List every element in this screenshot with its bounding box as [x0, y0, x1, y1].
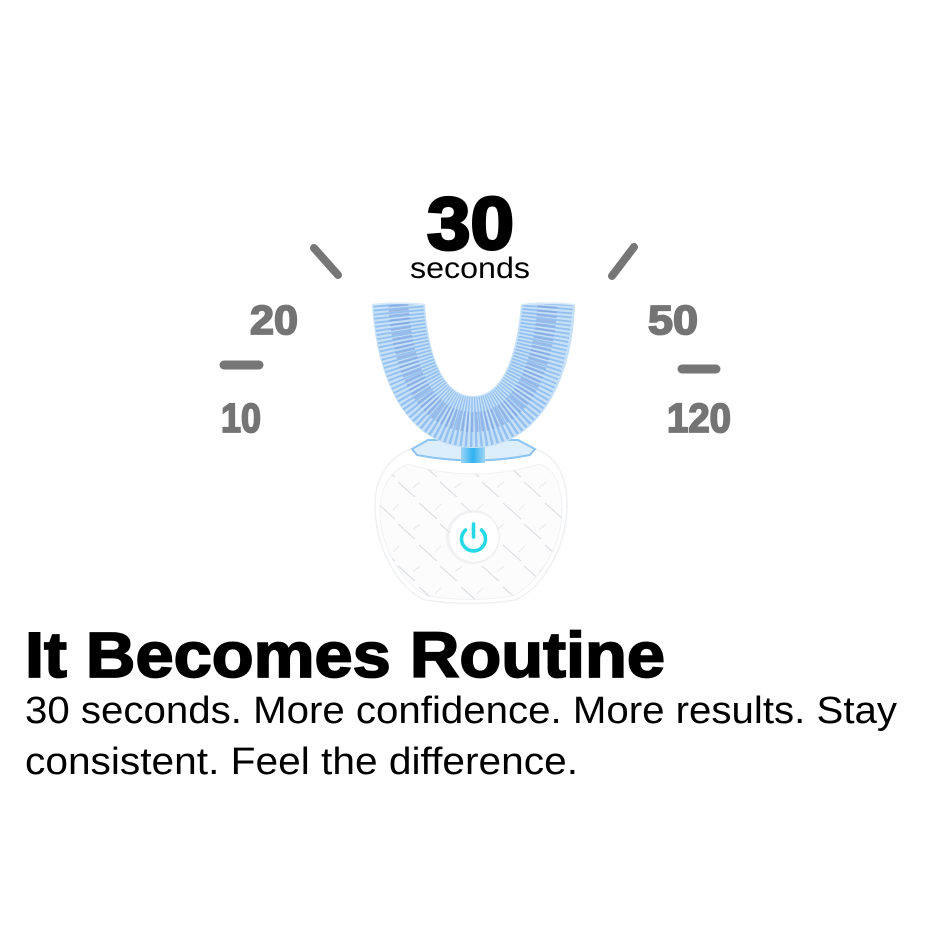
blue collar: [412, 440, 535, 463]
title: It Becomes Routine: [25, 619, 665, 691]
description text: 30 seconds. More confidence. More results. Stay: [25, 690, 897, 732]
tick upper left: [314, 248, 338, 275]
brush head bristles: [372, 302, 575, 448]
label 20: 20: [250, 297, 298, 343]
description text: [25, 690, 897, 783]
label 120: 120: [667, 395, 731, 441]
tick left: [224, 360, 259, 370]
description text: consistent. Feel the difference.: [25, 741, 578, 783]
gauge scale: [221, 247, 731, 441]
gauge value: 30 seconds: [410, 182, 530, 285]
label 10: 10: [221, 395, 261, 441]
seconds label: seconds: [410, 252, 530, 285]
icon: power symbol: [462, 524, 486, 551]
handle body: [375, 449, 567, 604]
label 50: 50: [648, 297, 698, 343]
number 30: 30: [427, 182, 514, 265]
tick right: [682, 364, 716, 374]
tick upper right: [612, 247, 634, 276]
toothbrush product image: [365, 295, 580, 604]
power button: [446, 510, 500, 564]
